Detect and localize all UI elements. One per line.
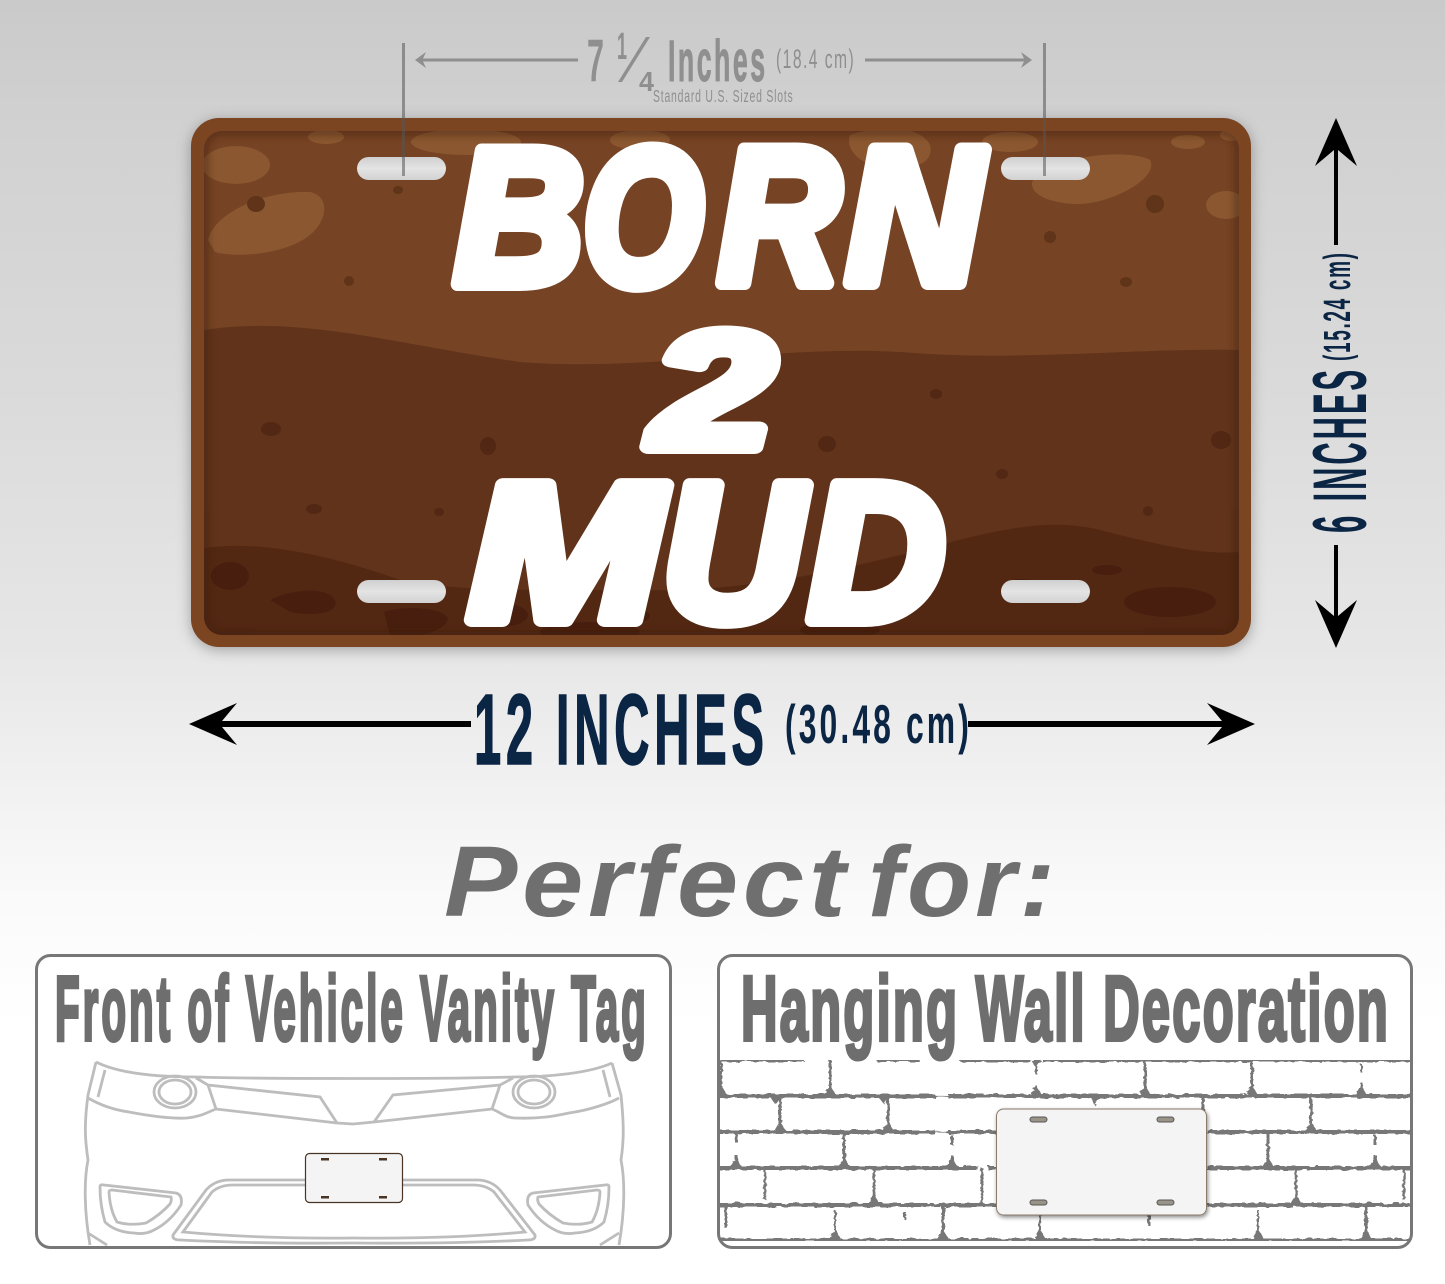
- heading: Perfect for: [444, 825, 1055, 938]
- plate text: BORN 2 MUD: D: [808, 443, 945, 662]
- plate text: BORN 2 MUD: B: [454, 109, 584, 326]
- heading: Perfect for: for:: [868, 825, 1055, 937]
- car front outline: [85, 1062, 624, 1245]
- panel: hanging wall decoration: [714, 956, 1412, 1248]
- width dimension: 12 inches: (30.48 cm): [785, 693, 969, 755]
- slot spacing dimension: 7 1/4 inches: Standard U.S. Sized Slots: [653, 87, 793, 107]
- plate text: BORN 2 MUD: O: [583, 109, 703, 326]
- plate text: BORN 2 MUD: U: [662, 443, 807, 662]
- panel: front of vehicle: [36, 956, 670, 1248]
- panel heading: Front of Vehicle Vanity Tag: [55, 958, 646, 1061]
- slot spacing dimension: 7 1/4 inches: 4: [639, 66, 654, 97]
- plate text: BORN 2 MUD: M: [468, 443, 666, 662]
- brick wall: [714, 1060, 1411, 1241]
- small blank plate on car: [306, 1154, 402, 1202]
- plate text: BORN 2 MUD: [454, 108, 986, 662]
- height dimension: 6 inches: (15.24 cm): [1317, 253, 1359, 361]
- slot spacing dimension: 7 1/4 inches: (18.4 cm): [776, 44, 854, 74]
- panel heading: Hanging Wall Decoration: [741, 957, 1388, 1060]
- plate border: [191, 118, 1251, 647]
- height dimension: 6 inches: 6 INCHES: [1298, 370, 1383, 533]
- slot spacing dimension: 7 1/4 inches: [402, 26, 1046, 176]
- width dimension: 12 inches: 12 INCHES: [474, 674, 764, 786]
- heading: Perfect for: Perfect: [444, 827, 850, 938]
- slot spacing dimension: 7 1/4 inches: Inches: [668, 28, 765, 94]
- plate text: BORN 2 MUD: 2: [648, 299, 774, 482]
- slot spacing dimension: 7 1/4 inches: 7: [587, 27, 604, 94]
- plate text: BORN 2 MUD: N: [846, 108, 986, 325]
- plate mud background: [202, 128, 1246, 642]
- height dimension: 6 inches: [1298, 118, 1383, 648]
- plate text: BORN 2 MUD: R: [718, 108, 840, 325]
- mortar junction blobs: [714, 1060, 1382, 1241]
- mounting slots: [357, 157, 1090, 603]
- license plate: [191, 108, 1251, 662]
- width dimension: 12 inches: [189, 674, 1255, 786]
- blank plate on wall: [996, 1109, 1206, 1215]
- slot spacing dimension: 7 1/4 inches: 1: [617, 26, 627, 68]
